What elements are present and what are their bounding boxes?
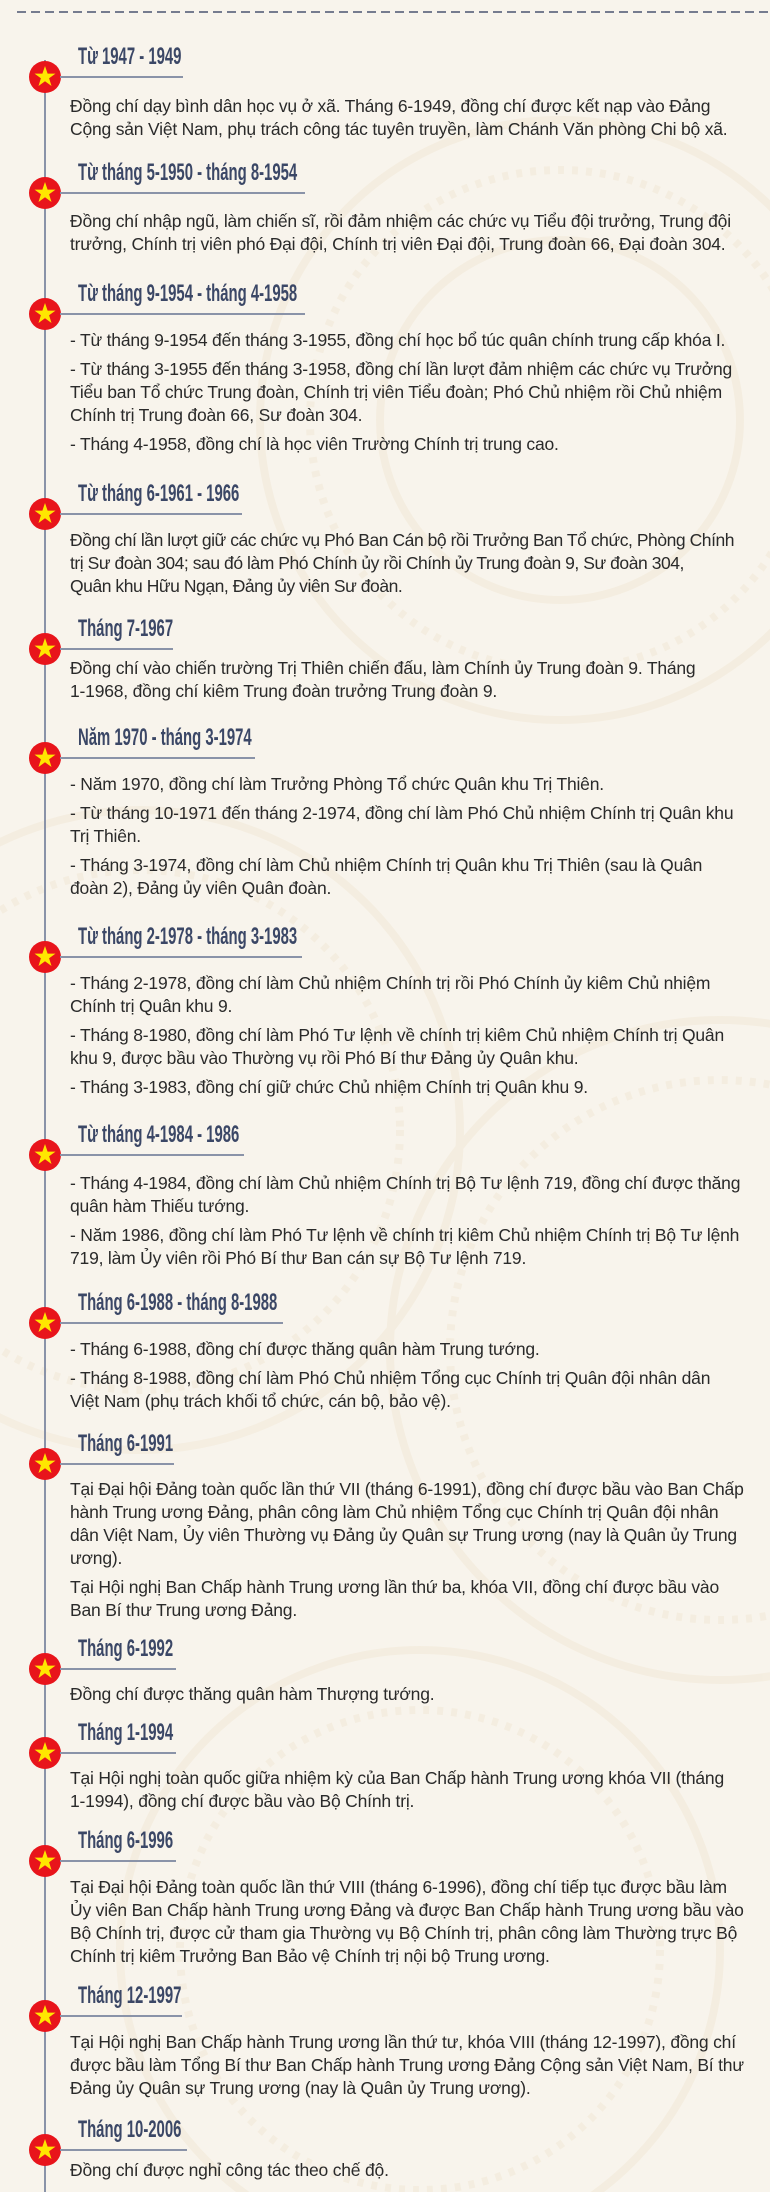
icon: star marker	[29, 61, 61, 93]
heading: Tháng 12-1997	[78, 1982, 181, 2009]
text: Tại Đại hội Đảng toàn quốc lần thứ VII (tháng 6-1991), đồng chí được bầu vào Ban Chấp	[70, 1479, 744, 1499]
entry 6-1992	[29, 1635, 434, 1704]
text: hành Trung ương Đảng, phân công làm Chủ nhiệm Tổng cục Chính trị Quân đội nhân	[70, 1502, 718, 1522]
heading: Từ tháng 5-1950 - tháng 8-1954	[78, 159, 297, 186]
icon: star marker	[29, 1653, 61, 1685]
entry 1947-1949	[29, 43, 727, 139]
text: 1-1994), đồng chí được bầu vào Bộ Chính trị.	[70, 1791, 414, 1811]
text: được bầu làm Tổng Bí thư Ban Chấp hành Trung ương Đảng Cộng sản Việt Nam, Bí thư	[70, 2055, 744, 2075]
text: Đồng chí dạy bình dân học vụ ở xã. Tháng 6-1949, đồng chí được kết nạp vào Đảng	[70, 96, 710, 116]
text: Đồng chí nhập ngũ, làm chiến sĩ, rồi đảm nhiệm các chức vụ Tiểu đội trưởng, Trung đội	[70, 211, 731, 231]
heading: Tháng 10-2006	[78, 2116, 181, 2143]
text: dân Việt Nam, Ủy viên Thường vụ Đảng ủy Quân sự Trung ương (nay là Quân ủy Trung	[70, 1525, 737, 1545]
text: - Tháng 4-1958, đồng chí là học viên Trường Chính trị trung cao.	[70, 434, 559, 454]
text: Bộ Chính trị, được cử tham gia Thường vụ Bộ Chính trị, phân công làm Thường trực Bộ	[70, 1923, 737, 1943]
text: - Tháng 3-1983, đồng chí giữ chức Chủ nhiệm Chính trị Quân khu 9.	[70, 1077, 588, 1097]
text: trị Sư đoàn 304; sau đó làm Phó Chính ủy rồi Chính ủy Trung đoàn 9, Sư đoàn 304,	[70, 553, 684, 573]
text: Ban Bí thư Trung ương Đảng.	[70, 1600, 297, 1620]
icon: star marker	[29, 298, 61, 330]
entry 6-1996	[29, 1827, 744, 1966]
text	[70, 330, 732, 454]
entry 1970 - 3-1974	[29, 724, 733, 898]
entry 12-1997	[29, 1982, 744, 2098]
text: 719, làm Ủy viên rồi Phó Bí thư Ban cán sự Bộ Tư lệnh 719.	[70, 1248, 526, 1268]
text	[70, 1173, 740, 1268]
text: khu 9, được bầu vào Thường vụ rồi Phó Bí thư Đảng ủy Quân khu.	[70, 1048, 578, 1068]
text: - Từ tháng 3-1955 đến tháng 3-1958, đồng chí lần lượt đảm nhiệm các chức vụ Trưởng	[70, 359, 732, 379]
heading: Từ tháng 2-1978 - tháng 3-1983	[78, 923, 297, 950]
text	[70, 96, 727, 139]
entry 6-1991	[29, 1430, 744, 1620]
text: Tại Hội nghị Ban Chấp hành Trung ương lần thứ ba, khóa VII, đồng chí được bầu vào	[70, 1577, 719, 1597]
icon: star marker	[29, 742, 61, 774]
text: trưởng, Chính trị viên phó Đại đội, Chính trị viên Đại đội, Trung đoàn 66, Đại đoàn 304.	[70, 234, 725, 254]
heading: Tháng 6-1991	[78, 1430, 173, 1457]
timeline axis	[44, 60, 46, 2192]
text	[70, 211, 731, 254]
entry 6-1988 - 8-1988	[29, 1289, 710, 1411]
text	[70, 658, 695, 701]
text	[70, 1339, 710, 1411]
heading: Tháng 1-1994	[78, 1719, 173, 1746]
heading: Tháng 6-1992	[78, 1635, 173, 1662]
icon: star marker	[29, 1448, 61, 1480]
entry 1-1994	[29, 1719, 724, 1811]
icon: star marker	[29, 1139, 61, 1171]
text: - Tháng 8-1988, đồng chí làm Phó Chủ nhiệm Tổng cục Chính trị Quân đội nhân dân	[70, 1368, 710, 1388]
entry 2-1978 - 3-1983	[29, 923, 724, 1097]
text: Trị Thiên.	[70, 826, 141, 846]
text: - Tháng 2-1978, đồng chí làm Chủ nhiệm Chính trị rồi Phó Chính ủy kiêm Chủ nhiệm	[70, 973, 710, 993]
text	[70, 2031, 744, 2106]
entry 9-1954 - 4-1958	[29, 280, 732, 454]
text: đoàn 2), Đảng ủy viên Quân đoàn.	[70, 878, 331, 898]
icon: star marker	[29, 177, 61, 209]
text	[70, 1877, 744, 1966]
text: Tại Hội nghị Ban Chấp hành Trung ương lần thứ tư, khóa VIII (tháng 12-1997), đồng chí	[70, 2032, 736, 2052]
heading: Từ tháng 9-1954 - tháng 4-1958	[78, 280, 297, 307]
text: Chính trị kiêm Trưởng Ban Bảo vệ Chính trị nội bộ Trung ương.	[70, 1946, 550, 1966]
text	[70, 1479, 744, 1620]
text: Tại Đại hội Đảng toàn quốc lần thứ VIII (tháng 6-1996), đồng chí tiếp tục được bầu làm	[70, 1877, 727, 1897]
heading: Tháng 7-1967	[78, 615, 173, 642]
icon: star marker	[29, 2134, 61, 2166]
text: Đồng chí vào chiến trường Trị Thiên chiến đấu, làm Chính ủy Trung đoàn 9. Tháng	[70, 658, 695, 678]
text: - Năm 1970, đồng chí làm Trưởng Phòng Tổ chức Quân khu Trị Thiên.	[70, 774, 604, 794]
text: - Từ tháng 10-1971 đến tháng 2-1974, đồng chí làm Phó Chủ nhiệm Chính trị Quân khu	[70, 803, 733, 823]
icon: star marker	[29, 2000, 61, 2032]
text: Cộng sản Việt Nam, phụ trách công tác tuyên truyền, làm Chánh Văn phòng Chi bộ xã.	[70, 119, 727, 139]
text	[70, 530, 734, 596]
text: Đồng chí được nghỉ công tác theo chế độ.	[70, 2160, 389, 2180]
text: 1-1968, đồng chí kiêm Trung đoàn trưởng Trung đoàn 9.	[70, 681, 497, 701]
heading: Tháng 6-1988 - tháng 8-1988	[78, 1289, 277, 1316]
icon: star marker	[29, 1307, 61, 1339]
heading: Từ tháng 4-1984 - 1986	[78, 1121, 239, 1148]
entry 5-1950 - 8-1954	[29, 159, 731, 254]
text	[70, 973, 724, 1097]
text	[70, 774, 733, 898]
entry 4-1984 - 1986	[29, 1121, 740, 1268]
text: Tại Hội nghị toàn quốc giữa nhiệm kỳ của Ban Chấp hành Trung ương khóa VII (tháng	[70, 1768, 724, 1788]
icon: star marker	[29, 633, 61, 665]
text: Việt Nam (phụ trách khối tổ chức, cán bộ, bảo vệ).	[70, 1391, 451, 1411]
text: - Từ tháng 9-1954 đến tháng 3-1955, đồng chí học bổ túc quân chính trung cấp khóa I.	[70, 330, 725, 350]
text: Đồng chí được thăng quân hàm Thượng tướng.	[70, 1684, 434, 1704]
text: Tiểu ban Tổ chức Trung đoàn, Chính trị viên Tiểu đoàn; Phó Chủ nhiệm rồi Chủ nhiệm	[70, 382, 722, 402]
text: - Tháng 6-1988, đồng chí được thăng quân hàm Trung tướng.	[70, 1339, 540, 1359]
icon: star marker	[29, 941, 61, 973]
text: - Tháng 4-1984, đồng chí làm Chủ nhiệm Chính trị Bộ Tư lệnh 719, đồng chí được thăng	[70, 1173, 740, 1193]
top dashed rule	[17, 11, 770, 13]
icon: star marker	[29, 1737, 61, 1769]
heading: Từ 1947 - 1949	[78, 43, 181, 70]
entry 7-1967	[29, 615, 695, 701]
text: Ủy viên Ban Chấp hành Trung ương Đảng và được Ban Chấp hành Trung ương bầu vào	[70, 1900, 744, 1920]
text	[70, 1768, 724, 1811]
text: - Tháng 3-1974, đồng chí làm Chủ nhiệm Chính trị Quân khu Trị Thiên (sau là Quân	[70, 855, 702, 875]
text: - Năm 1986, đồng chí làm Phó Tư lệnh về chính trị kiêm Chủ nhiệm Chính trị Bộ Tư lệnh	[70, 1225, 739, 1245]
heading: Từ tháng 6-1961 - 1966	[78, 480, 239, 507]
text: Quân khu Hữu Ngạn, Đảng ủy viên Sư đoàn.	[70, 576, 402, 596]
text: - Tháng 8-1980, đồng chí làm Phó Tư lệnh về chính trị kiêm Chủ nhiệm Chính trị Quân	[70, 1025, 724, 1045]
heading: Tháng 6-1996	[78, 1827, 173, 1854]
entry 10-2006	[0, 2110, 770, 2192]
entry 6-1961 - 1966	[29, 480, 734, 596]
text: quân hàm Thiếu tướng.	[70, 1196, 249, 1216]
text: ương).	[70, 1548, 122, 1568]
text: Đảng ủy Quân sự Trung ương (nay là Quân ủy Trung ương).	[70, 2078, 531, 2098]
icon: star marker	[29, 498, 61, 530]
heading: Năm 1970 - tháng 3-1974	[78, 724, 252, 751]
text: Đồng chí lần lượt giữ các chức vụ Phó Ban Cán bộ rồi Trưởng Ban Tổ chức, Phòng Chính	[70, 530, 734, 550]
text: Chính trị Trung đoàn 66, Sư đoàn 304.	[70, 405, 362, 425]
icon: star marker	[29, 1845, 61, 1877]
text: Chính trị Quân khu 9.	[70, 996, 232, 1016]
